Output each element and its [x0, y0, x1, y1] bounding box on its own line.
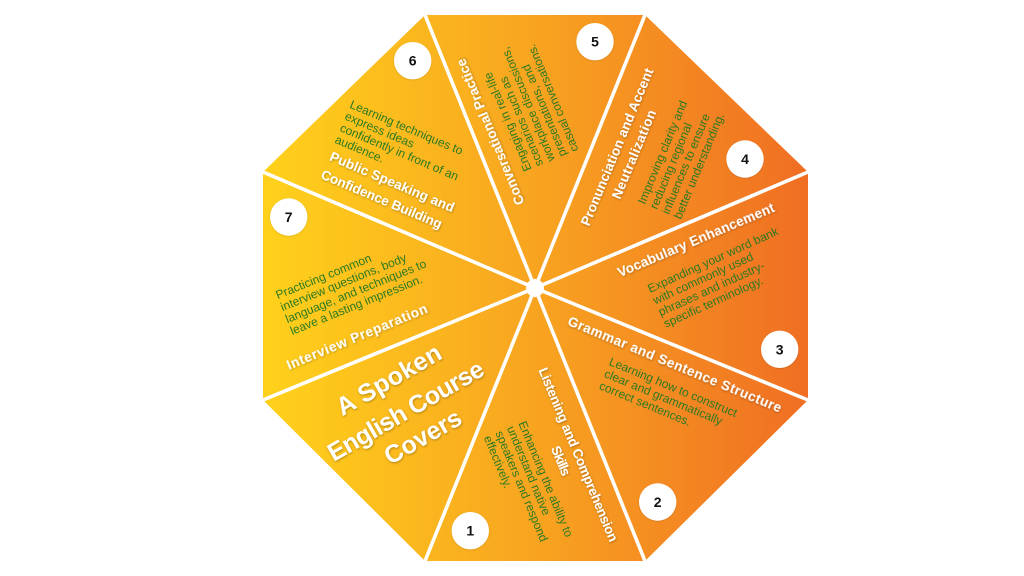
text: conversational description: workplace discussions, [498, 45, 558, 165]
heading: listening and comprehension skills: Skills [548, 444, 574, 478]
center hub circle [526, 279, 544, 297]
panel: 6 public speaking and confidence building [263, 15, 535, 288]
text: listening description: understand native [504, 424, 554, 518]
text: grammar description: correct sentences. [597, 379, 693, 429]
heading: public speaking and confidence building: Public Speaking and [328, 149, 457, 215]
panel: 5 conversational practice [425, 15, 645, 288]
text: public speaking description: express ideas [343, 109, 416, 151]
badge: 3 [761, 331, 798, 368]
text: public speaking description: confidently in front of an [338, 121, 461, 183]
panel: 2 grammar and sentence structure [535, 288, 808, 561]
badge: 6: 6 [409, 53, 417, 69]
text: conversational description: Engaging in real-life [481, 70, 534, 174]
badge: 7: 7 [285, 209, 293, 225]
heading: grammar and sentence structure: Grammar and Sentence Structure [566, 314, 784, 416]
text: conversational description: casual conversations. [524, 42, 581, 154]
text: listening description: effectively. [481, 433, 515, 490]
text: interview description: Practicing common [274, 251, 373, 302]
text: grammar description: Learning how to construct [607, 355, 740, 420]
panel: 1 listening and comprehension [425, 288, 645, 561]
heading: public speaking and confidence building: Confidence Building [319, 167, 444, 232]
text: vocabulary description: with commonly used [650, 250, 755, 308]
badge: 2: 2 [654, 494, 662, 510]
heading: listening and comprehension skills: Listening and Comprehension [536, 365, 621, 544]
heading: pronunciation and accent neutralization: Pronunciation and Accent [578, 66, 657, 228]
heading: A Spoken English Course Covers: English Course [323, 355, 489, 467]
text: pronunciation description: influences to ensure [659, 111, 713, 216]
badge: 3: 3 [776, 341, 784, 357]
panel: 7 interview preparation [263, 172, 535, 400]
badge: 4: 4 [741, 151, 749, 167]
heading: A Spoken English Course Covers: A Spoken [331, 339, 447, 421]
heading: interview preparation: Interview Preparation [284, 301, 430, 373]
text: listening description: Enhancing the ability to [516, 419, 576, 539]
text: interview description: language, and techniques to [283, 256, 429, 326]
text: pronunciation description: better understanding. [671, 111, 727, 221]
heading: pronunciation and accent neutralization: Neutralization [609, 108, 659, 201]
heading: A Spoken English Course Covers: Covers [379, 404, 467, 470]
text: interview description: interview questions, body [278, 251, 409, 314]
badge: 5: 5 [591, 34, 599, 50]
panel: title wedge [263, 288, 535, 561]
badge: 5 [576, 23, 614, 60]
heading: vocabulary enhancement: Vocabulary Enhancement [615, 200, 777, 280]
heading: conversational practice: Conversational Practice [453, 56, 527, 207]
text: pronunciation description: Improving clarity and [635, 98, 690, 206]
badge: 1 [452, 512, 489, 549]
badge: 7 [270, 198, 307, 236]
text: vocabulary description: specific terminology. [661, 273, 765, 331]
badge: 2 [639, 483, 676, 521]
text: public speaking description: Learning techniques to [348, 97, 465, 158]
badge: 4 [726, 140, 764, 178]
text: interview description: leave a lasting impression. [288, 272, 424, 338]
text: conversational description: presentations, and [519, 62, 570, 159]
text: conversational description: scenarios such as [497, 75, 546, 169]
panel: 4 pronunciation and accent neutralization [535, 15, 808, 288]
text: public speaking description: audience. [333, 132, 386, 166]
text: vocabulary description: Expanding your word bank [645, 224, 781, 296]
badge: 1: 1 [466, 523, 474, 539]
badge: 6 [394, 42, 431, 79]
text: vocabulary description: phrases and industry- [656, 258, 767, 319]
panel: 3 vocabulary enhancement [535, 172, 808, 400]
text: listening description: speakers and respond [492, 429, 551, 544]
text: pronunciation description: reducing regional [647, 121, 695, 211]
text: grammar description: clear and grammatically [602, 367, 725, 428]
